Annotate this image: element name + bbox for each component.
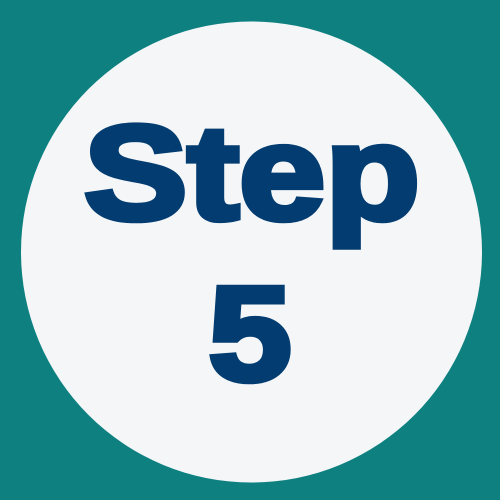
- heading: Step: Step: [84, 99, 420, 248]
- step number: 5: 5: [208, 260, 292, 409]
